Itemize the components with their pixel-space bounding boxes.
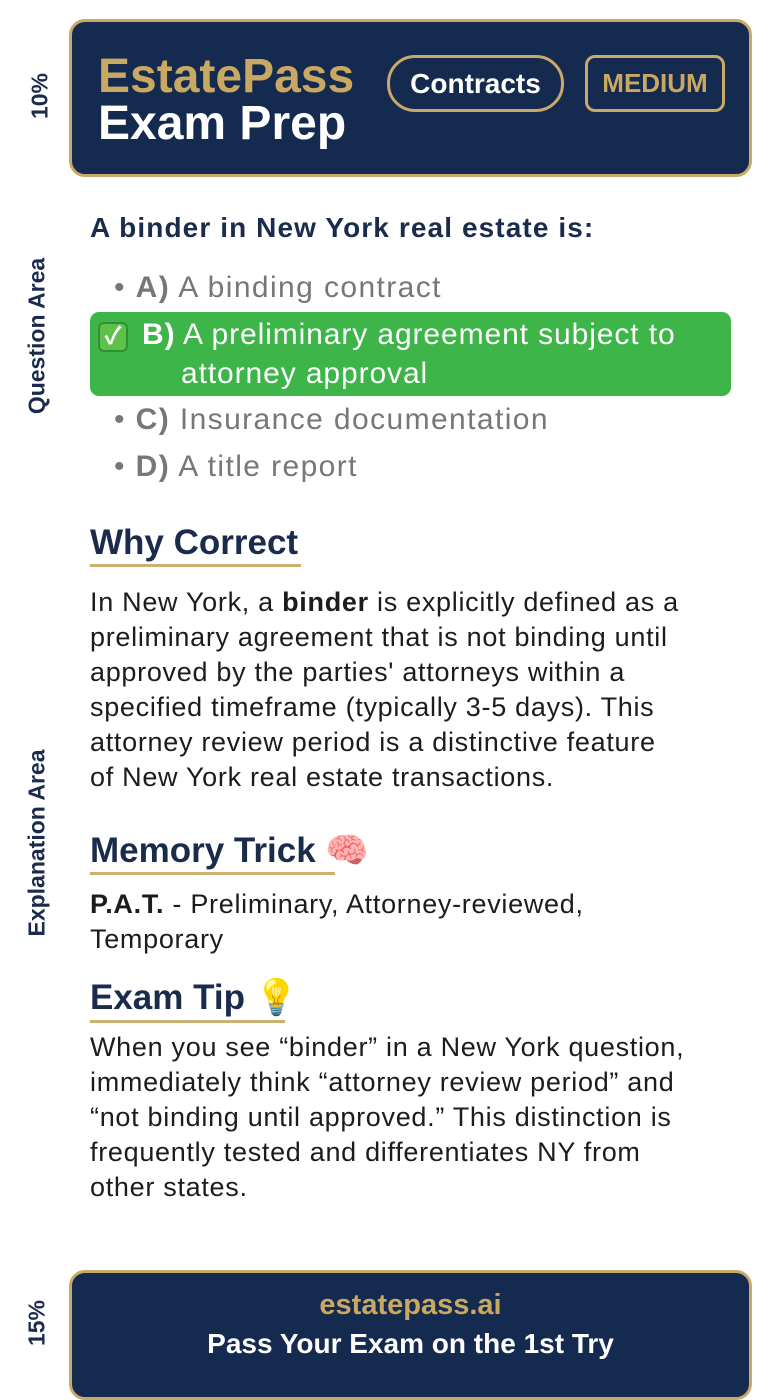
text: why correct: In New York, a binder is explicitly defined as a [90,587,679,617]
option C: • C) Insurance documentation [114,403,549,436]
text: memory trick: P.A.T. - Preliminary, Attorney-reviewed, [90,889,584,919]
option D: • D) A title report [114,450,358,483]
text: exam tip: “not binding until approved.” This distinction is [90,1102,672,1132]
text: why correct: specified timeframe (typically 3-5 days). This [90,692,654,722]
question: A binder in New York real estate is: [90,212,594,243]
text: why correct: preliminary agreement that is not binding until [90,622,668,652]
text: why correct: approved by the parties' attorneys within a [90,657,625,687]
icon: check: ✓ [104,323,122,350]
text: exam tip: When you see “binder” in a New York question, [90,1032,684,1062]
side label: 10%: 10% [26,73,52,119]
side label: Question Area: Question Area [24,258,50,414]
text: exam tip: immediately think “attorney review period” and [90,1067,674,1097]
text: exam tip [90,1032,684,1202]
footer tagline: Pass Your Exam on the 1st Try [207,1328,614,1359]
heading: Why Correct: Why Correct [90,523,298,562]
side label: 15%: 15% [24,1300,50,1346]
side label: Explanation Area: Explanation Area [24,749,50,937]
title: EstatePass: EstatePass [98,50,354,103]
footer url: estatepass.ai [319,1289,502,1321]
text: why correct: attorney review period is a distinctive feature [90,727,656,757]
option B (correct): B) A preliminary agreement subject to [142,318,676,351]
badge: MEDIUM: MEDIUM [602,68,708,98]
badge: Contracts [387,55,564,112]
text: exam tip: frequently tested and differentiates NY from [90,1137,641,1167]
text: memory trick [90,889,584,954]
text: why correct: of New York real estate transactions. [90,762,554,792]
heading: Exam Tip: Exam Tip 💡 [90,978,298,1017]
badge: Contracts: Contracts [410,68,541,99]
text: why correct [90,587,679,792]
text: memory trick: Temporary [90,924,224,954]
option A: • A) A binding contract [114,271,442,304]
icon: check [98,322,128,352]
heading: Memory Trick: Memory Trick 🧠 [90,831,369,870]
footer panel [69,1270,752,1400]
header panel [69,19,752,177]
text: exam tip: other states. [90,1172,248,1202]
option B (correct): attorney approval [181,357,428,390]
badge: MEDIUM [585,55,725,112]
subtitle: Exam Prep: Exam Prep [98,97,346,150]
option B (correct) [90,312,731,396]
